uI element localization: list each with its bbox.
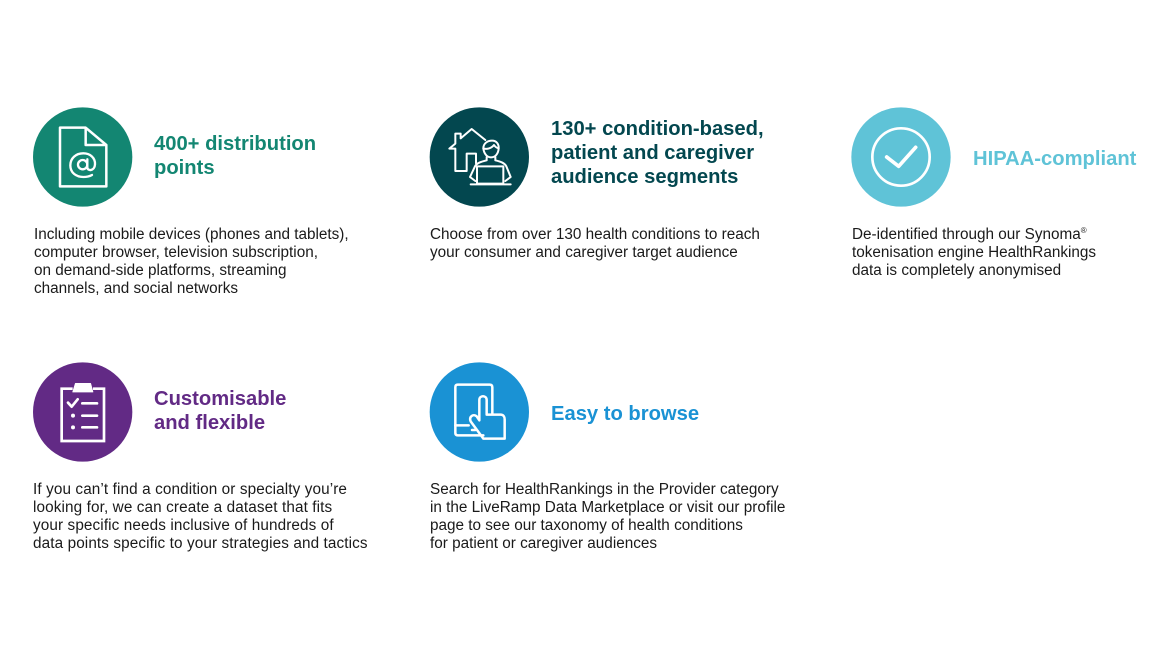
- text: customisable description: data points specific to your strategies and tactics: [33, 534, 368, 552]
- text: customisable description: your specific needs inclusive of hundreds of: [33, 516, 334, 534]
- text: browse description: page to see our taxonomy of health conditions: [430, 516, 743, 534]
- panel: distribution points: [33, 107, 349, 296]
- text: distribution description: channels, and social networks: [34, 280, 238, 296]
- icon: hand tapping tablet: [430, 362, 529, 462]
- text: customisable description: looking for, we can create a dataset that fits: [33, 498, 332, 516]
- panel: audience segments: [430, 107, 764, 260]
- heading: 400+ distribution points: 400+ distribution: [154, 133, 316, 155]
- text: browse description: Search for HealthRankings in the Provider category: [430, 480, 779, 498]
- panel: easy to browse: [430, 362, 785, 552]
- heading: 400+ distribution points: [154, 133, 316, 179]
- text: HIPAA description: [852, 225, 1096, 278]
- icon: clipboard checklist: [33, 362, 132, 462]
- text: browse description: for patient or caregiver audiences: [430, 534, 657, 552]
- text: browse description: in the LiveRamp Data Marketplace or visit our profile: [430, 498, 785, 516]
- icon: document with at sign: [33, 107, 132, 207]
- heading: 130+ audience segments: [551, 118, 764, 188]
- heading: Customisable and flexible: [154, 388, 286, 434]
- text: HIPAA description: data is completely anonymised: [852, 262, 1061, 278]
- heading: 130+ audience segments: audience segments: [551, 166, 738, 188]
- text: distribution description: on demand-side platforms, streaming: [34, 262, 287, 278]
- text: customisable description: If you can’t find a condition or specialty you’re: [33, 480, 347, 498]
- text: customisable description: [33, 480, 368, 552]
- heading: 400+ distribution points: points: [154, 157, 215, 179]
- panel: customisable and flexible: [33, 362, 368, 552]
- icon: check mark in circle: [851, 107, 951, 207]
- text: distribution description: [34, 226, 349, 296]
- heading: 130+ audience segments: patient and caregiver: [551, 142, 754, 164]
- text: audience description: [430, 226, 760, 260]
- text: HIPAA description: tokenisation engine HealthRankings: [852, 244, 1096, 260]
- text: distribution description: computer browser, television subscription,: [34, 244, 318, 260]
- heading: Customisable and flexible: and flexible: [154, 412, 265, 434]
- text: audience description: Choose from over 130 health conditions to reach: [430, 226, 760, 242]
- text: distribution description: Including mobile devices (phones and tablets),: [34, 226, 349, 242]
- heading: 130+ audience segments: 130+ condition-based,: [551, 118, 764, 140]
- text: audience description: your consumer and caregiver target audience: [430, 244, 738, 260]
- panel: HIPAA-compliant: [851, 107, 1136, 278]
- text: HIPAA description: De-identified through our Synoma®: [852, 225, 1087, 242]
- text: browse description: [430, 480, 785, 552]
- heading: Easy to browse: Easy to browse: [551, 403, 699, 425]
- heading: Customisable and flexible: Customisable: [154, 388, 286, 410]
- icon: house and person at laptop: [430, 107, 529, 207]
- heading: HIPAA-compliant: HIPAA-compliant: [973, 148, 1136, 170]
